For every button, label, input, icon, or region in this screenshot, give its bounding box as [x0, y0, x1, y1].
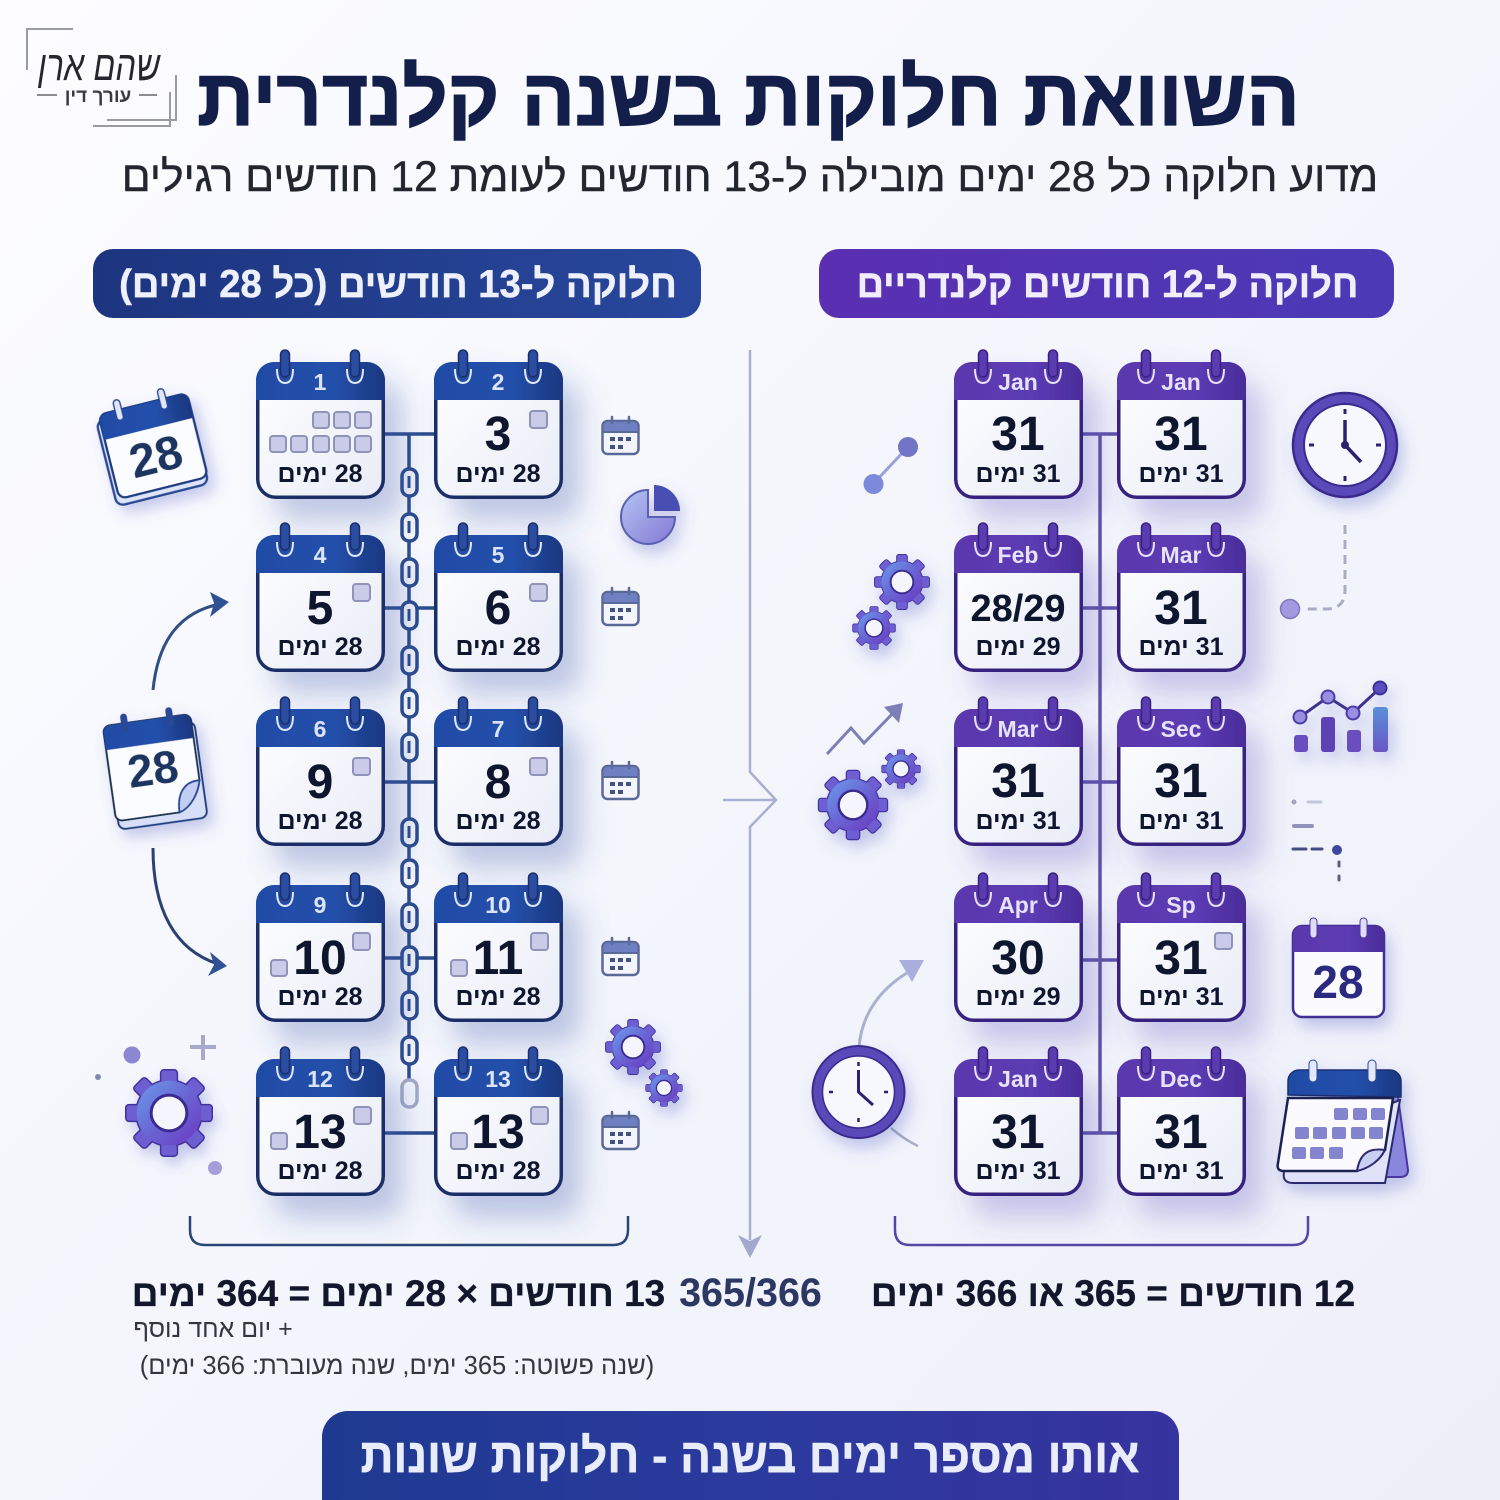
calendar: month 2: 2 [492, 369, 504, 395]
logo: שהם ארן [37, 42, 161, 89]
formula: 365/366: 365/366 [679, 1271, 822, 1315]
icon: large gear with dots [95, 1035, 222, 1175]
icon: trend arrow [827, 703, 903, 754]
calendar: Sp: 31 [1154, 932, 1208, 985]
calendar: Feb: 28/29 [970, 588, 1066, 630]
calendar: Jan: Jan [998, 369, 1038, 395]
calendar: month 9: 9 [314, 892, 326, 918]
bottom banner: אותו מספר ימים בשנה - חלוקות שונות [361, 1429, 1139, 1482]
calendar: Sp: 31 ימים [1138, 983, 1224, 1011]
icon: two gears [853, 555, 929, 649]
calendar: month 1: 28 ימים [277, 460, 363, 488]
bottom banner [322, 1411, 1179, 1500]
calendar: month 7: 7 [492, 716, 504, 742]
arrow: up to month 4 [153, 592, 229, 690]
calendar: Mar: 31 ימים [1138, 633, 1224, 661]
calendar: Jan second [1117, 350, 1246, 497]
calendar: Jan third [954, 1047, 1083, 1194]
note: one extra day: + יום אחד נוסף [133, 1315, 293, 1343]
center divider with arrow [723, 350, 776, 1258]
calendar: month 9: 28 ימים [277, 983, 363, 1011]
calendar: month 5: 28 ימים [455, 633, 541, 661]
calendar: Apr: 30 [991, 932, 1045, 985]
calendar: Mar second [954, 697, 1083, 844]
calendar: Jan [954, 350, 1083, 497]
bracket [190, 1216, 628, 1245]
icon: tilted calendar 28: 28 [124, 425, 188, 489]
calendar: month 7: 8 [485, 756, 511, 809]
calendar: month 12: 12 [307, 1066, 333, 1092]
icon: calendar 28: 28 [1312, 956, 1364, 1008]
calendar: month 5: 5 [492, 542, 505, 568]
icon: gears under trend [819, 750, 920, 839]
calendar: Jan third: Jan [998, 1066, 1038, 1092]
calendar: month 10: 28 ימים [455, 983, 541, 1011]
calendar: Mar: 31 [1154, 582, 1208, 635]
calendar: Sp: Sp [1166, 892, 1196, 918]
calendar: month 6 [256, 697, 385, 844]
calendar: month 4: 28 ימים [277, 633, 363, 661]
calendar: Feb: Feb [998, 542, 1038, 568]
icon: connected nodes [864, 437, 918, 494]
calendar: month 13 [434, 1047, 563, 1194]
icon: tilted calendar 28 [92, 383, 209, 506]
logo: עורך דין [65, 86, 131, 107]
icon: dashed path [1280, 525, 1345, 618]
calendar: month 1: 1 [314, 369, 327, 395]
icon: calendar 28 with curl: 28 [124, 740, 182, 798]
calendar: Jan second: Jan [1161, 369, 1201, 395]
calendar: month 13: 13 [485, 1066, 511, 1092]
calendar: Mar second: 31 ימים [975, 807, 1061, 835]
calendar: month 9 [256, 873, 385, 1020]
note: year lengths: (שנה פשוטה: 365 ימים, שנה מעוברת: 366 ימים) [140, 1352, 654, 1380]
calendar: Jan second: 31 ימים [1138, 460, 1224, 488]
calendar: month 10: 11 [473, 932, 523, 985]
calendar: Dec [1117, 1047, 1246, 1194]
calendar: Jan: 31 [991, 408, 1045, 461]
calendar: Dec: 31 ימים [1138, 1157, 1224, 1185]
calendar: Apr: 29 ימים [975, 983, 1061, 1011]
icon: small calendars [602, 417, 638, 1149]
heading pill: 12 months: חלוקה ל-12 חודשים קלנדריים [857, 262, 1358, 306]
calendar: month 7: 28 ימים [455, 807, 541, 835]
heading pill: 12 months [819, 249, 1394, 318]
bracket [895, 1216, 1308, 1245]
subtitle: מדוע חלוקה כל 28 ימים מובילה ל-13 חודשים לעומת 12 חודשים רגילים [122, 153, 1378, 201]
calendar: Jan: 31 ימים [975, 460, 1061, 488]
calendar: Jan second: 31 [1154, 408, 1208, 461]
calendar: Dec: Dec [1160, 1066, 1202, 1092]
calendar: month 5 [434, 523, 563, 670]
calendar: Apr [954, 873, 1083, 1020]
heading pill: 13 months: חלוקה ל-13 חודשים (כל 28 ימים) [119, 263, 677, 306]
calendar: month 2: 3 [485, 408, 511, 461]
calendar: Dec: 31 [1154, 1106, 1208, 1159]
calendar: month 13: 28 ימים [455, 1157, 541, 1185]
title: השוואת חלוקות בשנה קלנדרית [197, 53, 1300, 142]
icon: dotted dashes [1292, 800, 1342, 880]
icon: pair of gears [606, 1020, 682, 1106]
calendar: month 12: 13 [293, 1106, 347, 1159]
logo [27, 29, 176, 126]
calendar: month 10: 10 [485, 892, 511, 918]
calendar: month 10 [434, 873, 563, 1020]
calendar: month 6: 28 ימים [277, 807, 363, 835]
calendar: Jan third: 31 ימים [975, 1157, 1061, 1185]
calendar: month 12: 28 ימים [277, 1157, 363, 1185]
icon: small clock [812, 1046, 918, 1146]
calendar: Jan third: 31 [991, 1106, 1045, 1159]
calendar: month 1 [256, 350, 385, 497]
icon: calendar 28 [1293, 918, 1384, 1017]
panel: 12 calendar months [895, 350, 1308, 1245]
chain connector [385, 434, 434, 1133]
calendar: month 13: 13 [471, 1106, 525, 1159]
icon: clock [1293, 393, 1397, 497]
calendar: Sp [1117, 873, 1246, 1020]
calendar: Apr: Apr [998, 892, 1038, 918]
calendar: Mar second: Mar [998, 716, 1038, 742]
calendar: month 9: 10 [293, 932, 347, 985]
calendar: month 4 [256, 523, 385, 670]
heading pill: 13 months [93, 249, 701, 318]
calendar: month 2: 28 ימים [455, 460, 541, 488]
calendar: month 7 [434, 697, 563, 844]
calendar: Mar [1117, 523, 1246, 670]
calendar: Sec: 31 [1154, 755, 1208, 808]
calendar: month 5: 6 [485, 582, 511, 635]
icon: calendar 28 with curl [101, 704, 208, 830]
calendar: Sec: Sec [1161, 716, 1202, 742]
arrow: lavender to April [859, 960, 924, 1047]
panel: 13 months of 28 days [190, 350, 628, 1245]
icon: bar and line chart [1294, 682, 1388, 752]
calendar: month 4: 4 [314, 542, 327, 568]
calendar: Feb: 29 ימים [975, 633, 1061, 661]
calendar: Feb [954, 523, 1083, 670]
icon: large desk calendar [1278, 1060, 1408, 1183]
icon: pie chart [621, 485, 680, 544]
calendar: month 12 [256, 1047, 385, 1194]
arrow: down to month 9 [153, 848, 227, 976]
calendar: Sec: 31 ימים [1138, 807, 1224, 835]
calendar: Mar second: 31 [991, 755, 1045, 808]
calendar: Mar: Mar [1161, 542, 1201, 568]
calendar: month 2 [434, 350, 563, 497]
calendar: Sec [1117, 697, 1246, 844]
timeline connector [1083, 434, 1117, 1133]
calendar: month 6: 6 [314, 716, 326, 742]
calendar: month 6: 9 [307, 756, 333, 809]
formula: 12 months: 12 חודשים = 365 או 366 ימים [871, 1273, 1355, 1314]
formula: 13 months: 13 חודשים × 28 ימים = 364 ימים [132, 1273, 665, 1314]
calendar: month 4: 5 [307, 582, 333, 635]
